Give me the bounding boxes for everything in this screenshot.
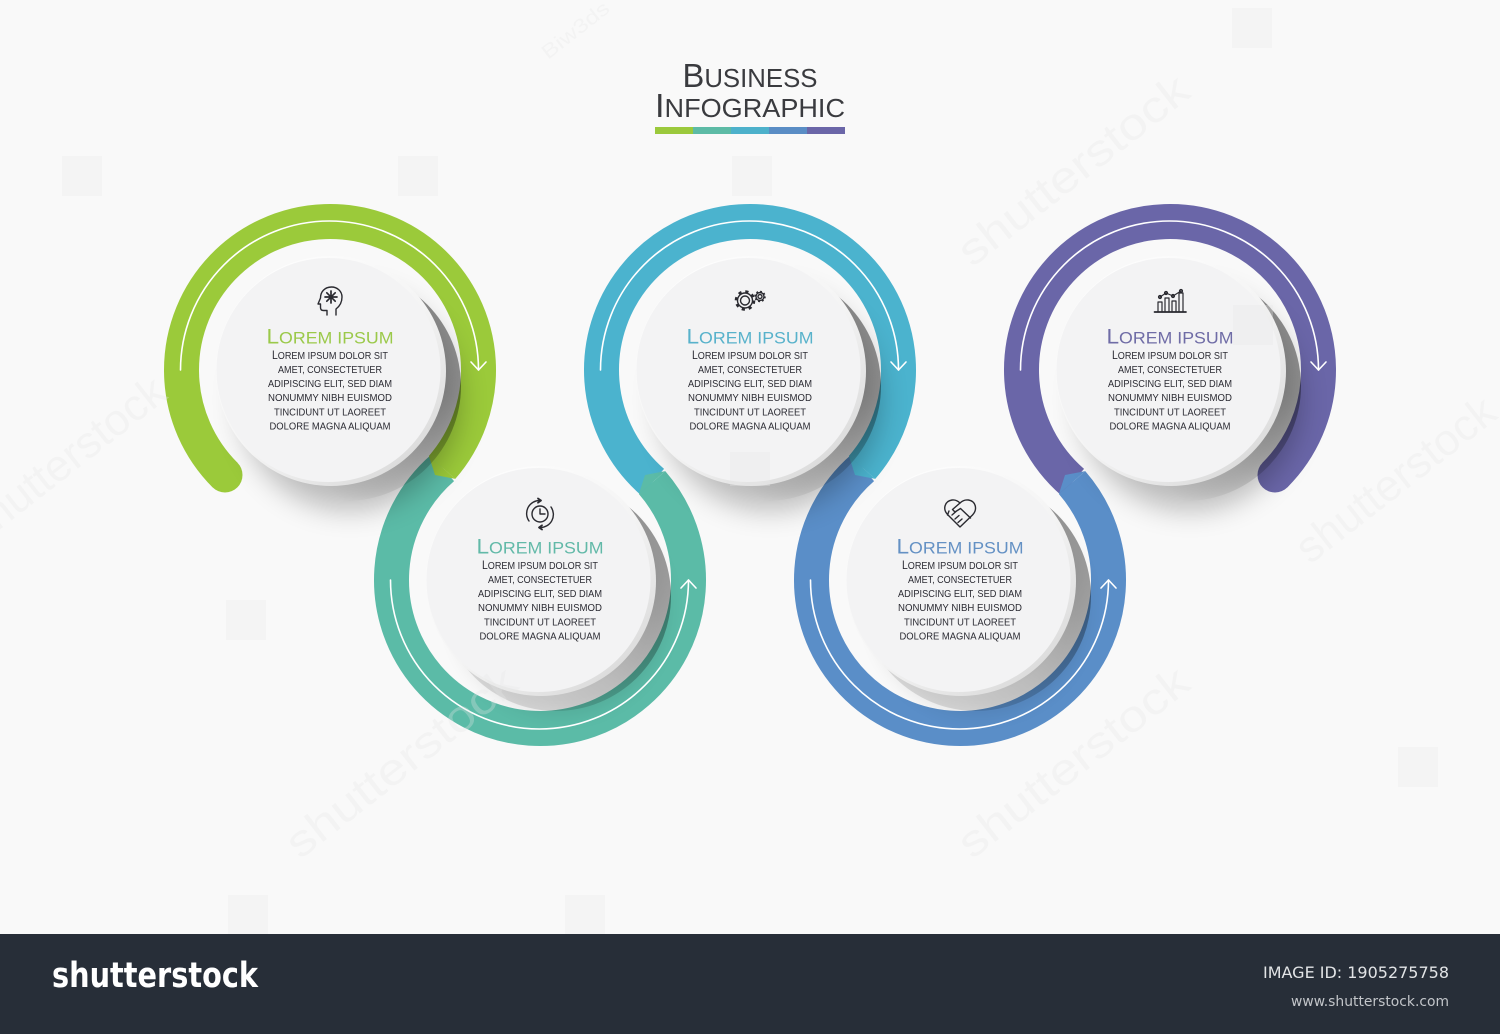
body text: LOREM IPSUM DOLOR SIT [692,348,809,362]
white arrow: cyan ring [600,221,906,370]
body text: AMET, CONSECTETUER [278,364,382,376]
icon: handshake heart [945,500,975,527]
body text [898,558,1022,642]
body text: ADIPISCING ELIT, SED DIAM [898,588,1022,600]
body text: TINCIDUNT UT LAOREET [904,616,1017,628]
body text: NONUMMY NIBH EUISMOD [268,392,392,404]
white arrow: teal ring [390,580,696,729]
watermark layer: Biw3ds [538,0,614,64]
icon: head with asterisk [318,287,342,315]
footer logo: shutterstock [52,956,259,996]
footer bar [0,934,1500,1034]
white arrow: blue ring [810,580,1116,729]
body text: NONUMMY NIBH EUISMOD [898,602,1022,614]
body text: AMET, CONSECTETUER [488,574,592,586]
heading: LOREM IPSUM [476,536,604,558]
panel: step 2 disc [426,466,656,696]
ring: teal step 2 [391,468,689,728]
icon: bar chart with trend line [1154,290,1186,312]
body text: ADIPISCING ELIT, SED DIAM [268,378,392,390]
ring: green step 1 [182,221,479,492]
body text: AMET, CONSECTETUER [908,574,1012,586]
heading: LOREM IPSUM [1106,326,1234,348]
footer url: www.shutterstock.com [1291,994,1449,1010]
title: BUSINESS [682,57,818,94]
body text: DOLORE MAGNA ALIQUAM [270,420,390,432]
body text: NONUMMY NIBH EUISMOD [1108,392,1232,404]
body text: DOLORE MAGNA ALIQUAM [900,630,1020,642]
body text: AMET, CONSECTETUER [1118,364,1222,376]
body text: ADIPISCING ELIT, SED DIAM [688,378,812,390]
watermark layer: shutterstock [948,656,1200,868]
body text: LOREM IPSUM DOLOR SIT [902,558,1019,572]
body text: TINCIDUNT UT LAOREET [694,406,807,418]
title: INFOGRAPHIC [655,87,845,124]
watermark layer: shutterstock [276,656,528,868]
body text [268,348,392,432]
body text: TINCIDUNT UT LAOREET [274,406,387,418]
white arrow: purple ring [1020,221,1326,370]
body text: NONUMMY NIBH EUISMOD [688,392,812,404]
body text: NONUMMY NIBH EUISMOD [478,602,602,614]
body text: ADIPISCING ELIT, SED DIAM [478,588,602,600]
watermark layer: shutterstock [1286,386,1500,573]
body text [688,348,812,432]
icon: gears [736,292,765,310]
heading: LOREM IPSUM [896,536,1024,558]
ring: blue step 4 [811,468,1108,728]
ring: cyan step 3 [602,222,898,482]
ring: purple step 5 [1021,221,1318,492]
body text: DOLORE MAGNA ALIQUAM [1110,420,1230,432]
body text: LOREM IPSUM DOLOR SIT [1112,348,1229,362]
disc shadows [231,271,1301,716]
heading: LOREM IPSUM [266,326,394,348]
body text: LOREM IPSUM DOLOR SIT [482,558,599,572]
body text: DOLORE MAGNA ALIQUAM [480,630,600,642]
panel: step 4 disc [846,466,1076,696]
footer image id: IMAGE ID: 1905275758 [1263,963,1449,982]
body text: ADIPISCING ELIT, SED DIAM [1108,378,1232,390]
body text: LOREM IPSUM DOLOR SIT [272,348,389,362]
body text [478,558,602,642]
body text: AMET, CONSECTETUER [698,364,802,376]
panel: step 1 disc [216,256,446,486]
heading: LOREM IPSUM [686,326,814,348]
panel: step 3 disc [636,256,866,486]
title colour bar [655,127,845,134]
body text [1108,348,1232,432]
watermark layer: shutterstock [948,64,1200,276]
body text: DOLORE MAGNA ALIQUAM [690,420,810,432]
body text: TINCIDUNT UT LAOREET [484,616,597,628]
panel: step 5 disc [1056,256,1286,486]
title [655,57,845,124]
white arrow: green ring [180,221,486,370]
icon: clock with circular arrows [527,498,553,530]
body text: TINCIDUNT UT LAOREET [1114,406,1227,418]
